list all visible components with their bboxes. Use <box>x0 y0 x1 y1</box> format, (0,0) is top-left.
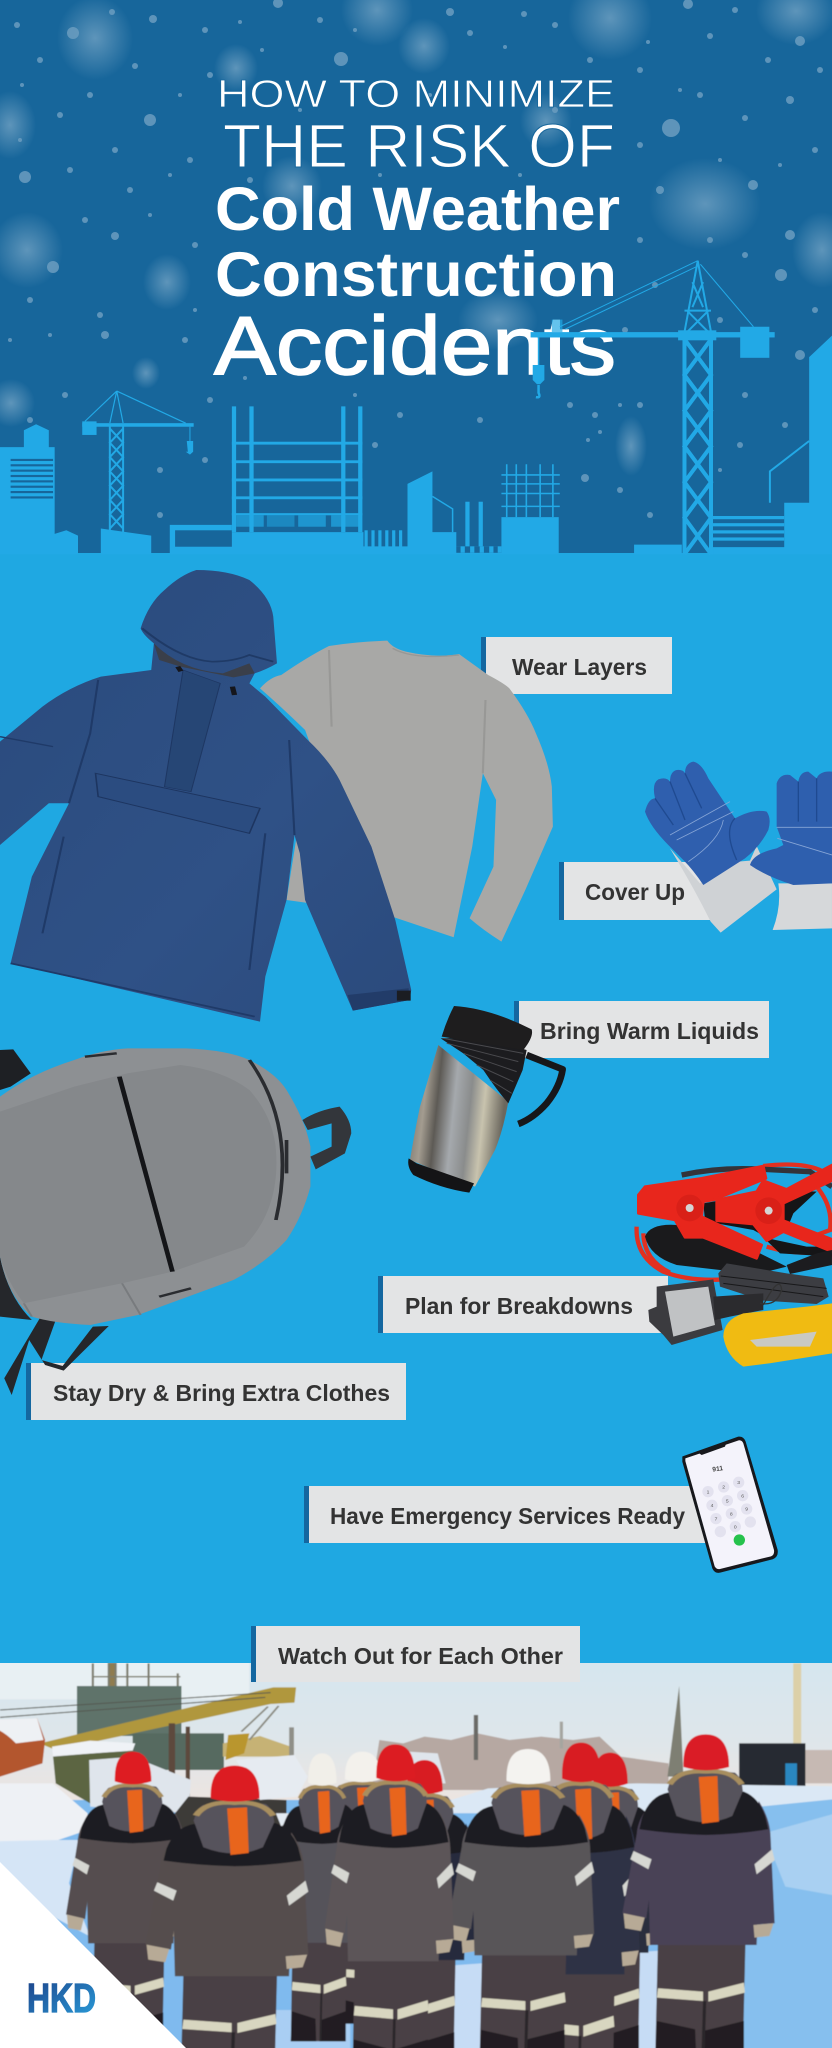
steel frame building <box>232 406 362 532</box>
right glove cuff <box>773 883 832 930</box>
white corner triangle <box>0 1862 186 2048</box>
phone showing 911 dial pad: 3 <box>737 1480 740 1486</box>
label: Have Emergency Services Ready: Have Emergency Services Ready <box>330 1503 685 1529</box>
phone showing 911 dial pad: 6 <box>741 1493 744 1499</box>
right glove <box>750 772 832 885</box>
phone showing 911 dial pad: 1 <box>707 1489 710 1495</box>
label: Stay Dry & Bring Extra Clothes <box>26 1363 406 1420</box>
phone showing 911 dial pad: 2 <box>722 1485 725 1491</box>
title: HOW TO MINIMIZE <box>217 73 615 116</box>
phone showing 911 dial pad: 7 <box>715 1516 718 1522</box>
skyline with cranes and buildings <box>0 261 832 554</box>
label: Plan for Breakdowns <box>378 1276 668 1333</box>
big crane <box>531 261 775 554</box>
phone showing 911 dial pad: 911 <box>712 1465 724 1474</box>
label: Cover Up: Cover Up <box>585 879 685 905</box>
gloves: blue work gloves <box>645 762 832 933</box>
background: main blue <box>0 553 832 1668</box>
label: Watch Out for Each Other: Watch Out for Each Other <box>278 1643 563 1669</box>
jumper cables and tow kit <box>637 1165 832 1367</box>
trucks under snow <box>0 1718 45 1783</box>
label: Wear Layers: Wear Layers <box>512 654 647 680</box>
phone showing 911 dial pad: 4 <box>711 1503 714 1509</box>
title: Construction <box>215 240 617 310</box>
photo: workers walking through snow <box>0 1640 832 2048</box>
title: THE RISK OF <box>223 112 615 180</box>
title: Accidents <box>214 299 616 392</box>
left glove <box>645 762 770 885</box>
jacket: navy anorak <box>0 570 411 1022</box>
shirt: gray long sleeve <box>260 641 553 942</box>
label: Plan for Breakdowns: Plan for Breakdowns <box>405 1293 633 1319</box>
rebar grid <box>501 464 560 517</box>
snow ground <box>451 1783 832 1813</box>
phone showing 911 dial pad: 9 <box>745 1507 748 1513</box>
backpack: gray <box>0 1048 351 1395</box>
label: Cover Up <box>559 862 714 920</box>
label: Have Emergency Services Ready <box>304 1486 709 1543</box>
label: Bring Warm Liquids <box>514 1001 769 1058</box>
background: sky <box>0 0 832 560</box>
logo: HKD: HKD <box>27 1975 96 2021</box>
snowfall <box>0 0 832 518</box>
title <box>214 73 620 392</box>
sky haze left <box>0 1663 250 1700</box>
light road centre <box>453 1950 658 2048</box>
phone showing 911 dial pad <box>683 1437 777 1572</box>
phone showing 911 dial pad: 5 <box>726 1498 729 1504</box>
label: Wear Layers <box>481 637 672 694</box>
yellow boom <box>40 1687 296 1750</box>
title: Cold Weather <box>215 175 620 243</box>
phone showing 911 dial pad: 8 <box>730 1511 733 1517</box>
label: Stay Dry & Bring Extra Clothes: Stay Dry & Bring Extra Clothes <box>53 1380 390 1406</box>
mug: travel mug <box>408 1006 563 1193</box>
phone showing 911 dial pad: 0 <box>734 1524 737 1530</box>
left glove cuff <box>670 846 777 933</box>
workers <box>336 1752 381 2024</box>
label: Bring Warm Liquids: Bring Warm Liquids <box>540 1018 759 1044</box>
label: Watch Out for Each Other <box>251 1626 580 1682</box>
small crane <box>82 391 194 532</box>
